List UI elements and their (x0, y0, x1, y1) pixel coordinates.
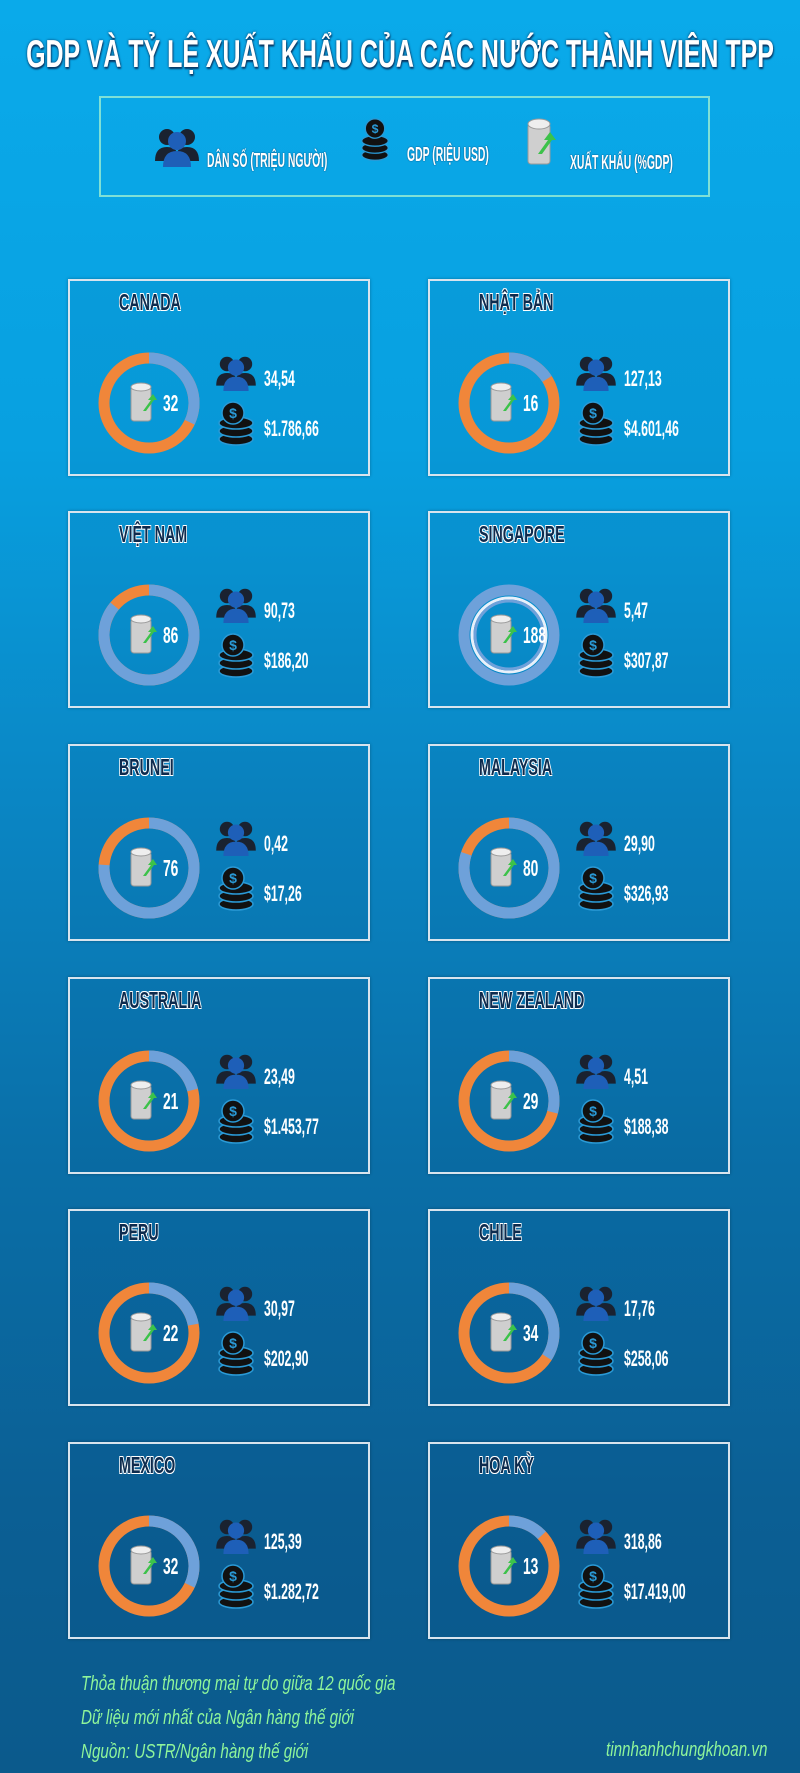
icon: coins: $ (229, 1103, 237, 1119)
donut chart (458, 584, 560, 686)
icon: coins (218, 1564, 254, 1609)
card: Việt Nam: 86 (163, 622, 178, 648)
card: Việt Nam: 90,73 (264, 598, 295, 623)
card: Brunei: $17,26 (264, 881, 302, 906)
donut chart (98, 818, 200, 918)
icon: population (155, 129, 199, 167)
donut chart (458, 1050, 560, 1152)
icon: exports (528, 118, 556, 164)
card: Malaysia (428, 744, 730, 941)
icon: coins: $ (589, 870, 597, 886)
card: Peru: 30,97 (264, 1296, 295, 1321)
donut chart (98, 584, 200, 686)
card: New Zealand (428, 977, 730, 1174)
card: Singapore: $307,87 (624, 648, 669, 673)
icon: coins (578, 1564, 614, 1609)
icon: population (576, 356, 616, 391)
card: Mexico: MEXICO (119, 1452, 175, 1478)
card: Hoa Kỳ: $17.419,00 (624, 1579, 686, 1604)
card: Canada: 32 (163, 390, 178, 416)
card: Singapore (428, 511, 730, 708)
card: Mexico: 32 (163, 1553, 178, 1579)
donut chart (458, 1282, 560, 1384)
card: Peru: $202,90 (264, 1346, 309, 1371)
icon: population (576, 588, 616, 623)
card: Singapore: 5,47 (624, 598, 648, 623)
card: Canada: $1.786,66 (264, 416, 319, 441)
legend text: gdp: GDP (RIỆU USD) (407, 144, 489, 166)
icon: coins (218, 633, 254, 678)
card: Peru: PERU (119, 1219, 159, 1245)
icon: coins (578, 866, 614, 911)
donut chart (458, 352, 560, 454)
icon: coins (578, 1331, 614, 1376)
icon: coins: $ (589, 405, 597, 421)
icon: coins (218, 866, 254, 911)
icon: coins: $ (372, 122, 379, 136)
card: New Zealand: 29 (523, 1088, 538, 1114)
legend text: population: DÂN SỐ (TRIỆU NGƯỜI) (207, 150, 327, 172)
card: Nhật Bản: $4.601,46 (624, 416, 679, 441)
card: Malaysia: MALAYSIA (479, 754, 552, 780)
donut chart (458, 818, 560, 918)
icon: coins: $ (589, 637, 597, 653)
card: Nhật Bản: NHẬT BẢN (479, 289, 553, 315)
card: Mexico: 125,39 (264, 1529, 302, 1554)
card: Hoa Kỳ: HOA KỲ (479, 1452, 534, 1478)
card: New Zealand: $188,38 (624, 1114, 669, 1139)
icon: coins: $ (229, 1335, 237, 1351)
card: Australia: 23,49 (264, 1064, 295, 1089)
card: Peru: 22 (163, 1320, 178, 1346)
icon: coins (578, 401, 614, 446)
card: Brunei: 0,42 (264, 831, 288, 856)
card: Brunei: BRUNEI (119, 754, 174, 780)
card: Hoa Kỳ: 13 (523, 1553, 538, 1579)
footer notes (81, 1673, 395, 1763)
footer notes: Dữ liệu mới nhất của Ngân hàng thế giới (81, 1707, 354, 1729)
card: New Zealand: 4,51 (624, 1064, 648, 1089)
card: Việt Nam (68, 511, 370, 708)
icon: coins: $ (589, 1568, 597, 1584)
icon: coins (218, 1331, 254, 1376)
icon: population (216, 1054, 256, 1089)
card: Nhật Bản: 127,13 (624, 366, 662, 391)
card: Chile: $258,06 (624, 1346, 669, 1371)
donut chart (98, 1282, 200, 1384)
icon: population (576, 1054, 616, 1089)
card: Chile: CHILE (479, 1219, 522, 1245)
icon: coins: $ (589, 1103, 597, 1119)
donut chart (98, 352, 200, 454)
card: Peru (68, 1209, 370, 1406)
icon: coins (578, 1099, 614, 1144)
card: Malaysia: 29,90 (624, 831, 655, 856)
card: Malaysia: $326,93 (624, 881, 669, 906)
icon: coins (361, 118, 389, 161)
card: Việt Nam: VIỆT NAM (119, 521, 187, 547)
footer notes: Thỏa thuận thương mại tự do giữa 12 quốc gia (81, 1673, 395, 1695)
card: Nhật Bản (428, 279, 730, 476)
icon: population (576, 1286, 616, 1321)
legend text: exports: XUẤT KHẨU (%GDP) (570, 152, 673, 174)
icon: coins (218, 1099, 254, 1144)
card: Mexico (68, 1442, 370, 1639)
icon: population (576, 1520, 616, 1554)
source website: tinnhanhchungkhoan.vn (606, 1739, 767, 1761)
icon: coins: $ (229, 405, 237, 421)
card: Australia: 21 (163, 1088, 178, 1114)
icon: population (216, 356, 256, 391)
card: Singapore: 188 (523, 622, 546, 648)
card: Hoa Kỳ (428, 1442, 730, 1639)
card: Singapore: SINGAPORE (479, 521, 565, 547)
icon: coins: $ (589, 1335, 597, 1351)
icon: population (216, 1520, 256, 1554)
card: New Zealand: NEW ZEALAND (479, 987, 584, 1013)
icon: coins: $ (229, 637, 237, 653)
icon: coins: $ (229, 1568, 237, 1584)
icon: population (216, 822, 256, 856)
card: Canada: CANADA (119, 289, 181, 315)
card: Canada: 34,54 (264, 366, 295, 391)
legend (99, 96, 710, 197)
card: Australia (68, 977, 370, 1174)
card: Malaysia: 80 (523, 855, 538, 881)
card: Canada (68, 279, 370, 476)
card: Hoa Kỳ: 318,86 (624, 1529, 662, 1554)
card: Chile: 34 (523, 1320, 538, 1346)
title: GDP VÀ TỶ LỆ XUẤT KHẨU CỦA CÁC NƯỚC THÀNH VIÊN TPP (26, 33, 774, 76)
card: Brunei (68, 744, 370, 941)
card: Nhật Bản: 16 (523, 390, 538, 416)
icon: coins (578, 633, 614, 678)
card: Việt Nam: $186,20 (264, 648, 309, 673)
card: Mexico: $1.282,72 (264, 1579, 319, 1604)
donut chart (458, 1516, 560, 1616)
card: Chile (428, 1209, 730, 1406)
donut chart (98, 1050, 200, 1152)
icon: coins (218, 401, 254, 446)
icon: population (216, 588, 256, 623)
icon: population (576, 822, 616, 856)
icon: population (216, 1286, 256, 1321)
card: Australia: AUSTRALIA (119, 987, 201, 1013)
card: Chile: 17,76 (624, 1296, 655, 1321)
donut chart (98, 1516, 200, 1616)
footer notes: Nguồn: USTR/Ngân hàng thế giới (81, 1741, 308, 1763)
icon: coins: $ (229, 870, 237, 886)
card: Australia: $1.453,77 (264, 1114, 319, 1139)
card: Brunei: 76 (163, 855, 178, 881)
